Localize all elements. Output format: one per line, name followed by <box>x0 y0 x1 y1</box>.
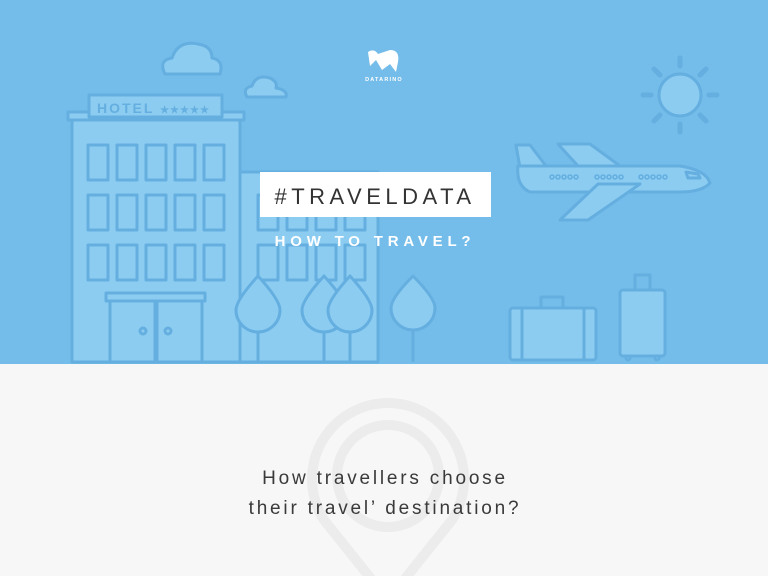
icon: suitcase <box>510 297 596 360</box>
logo: datarino <box>365 50 403 83</box>
icon: cloud big <box>163 43 221 74</box>
illustration: second building <box>240 172 378 362</box>
hotel sign text: HOTEL ★★★★★ <box>97 100 210 116</box>
icon: cloud small <box>245 77 286 97</box>
question text: How travellers choose <box>262 468 508 489</box>
icon: trolley bag <box>620 275 665 360</box>
icon: location pin <box>312 403 464 576</box>
logo: datarino: DATARINO <box>365 77 403 83</box>
illustration: hotel building <box>68 95 244 362</box>
question text <box>249 468 521 519</box>
icon: airplane <box>516 144 710 220</box>
icon: sun <box>643 58 717 132</box>
question text: their travel’ destination? <box>249 498 521 519</box>
title box: #TRAVELDATA <box>274 184 476 209</box>
subtitle: HOW TO TRAVEL? <box>275 233 475 250</box>
title box <box>260 172 491 217</box>
icon: trees <box>236 276 435 362</box>
